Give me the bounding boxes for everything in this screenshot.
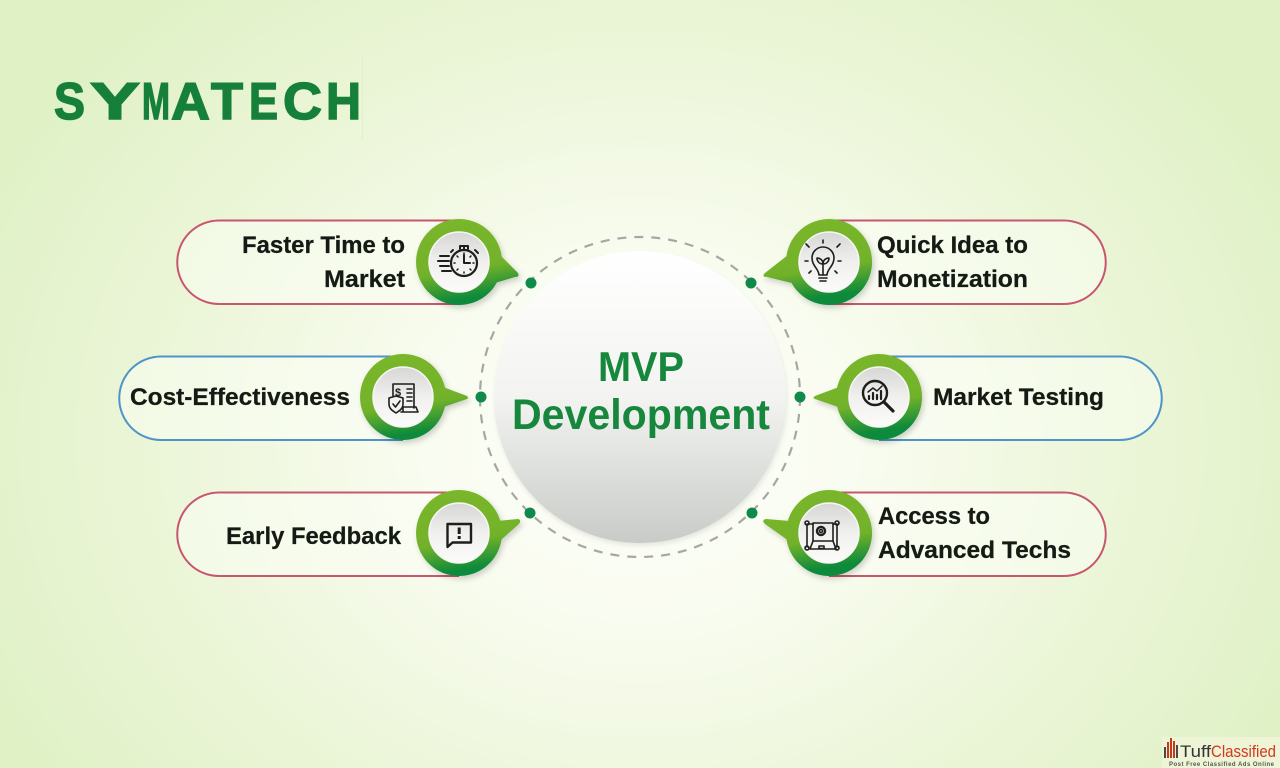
watermark: Tuff (1180, 742, 1211, 761)
badge: $ (395, 387, 401, 399)
icon: lightbulb (805, 240, 841, 281)
label: Access to (878, 503, 990, 530)
badge (763, 490, 872, 576)
hub title: Development (512, 391, 770, 439)
badge (416, 490, 520, 576)
hub title (512, 343, 770, 439)
label (878, 503, 1071, 564)
panel: faster time to market (177, 219, 519, 305)
badge (416, 219, 519, 305)
badge (360, 354, 468, 440)
panel: access to advanced techs (763, 490, 1106, 576)
label: Cost-Effectiveness (130, 384, 350, 411)
logo: T (211, 73, 243, 131)
icon: invoice and shield (389, 384, 418, 413)
panel: early feedback (177, 490, 520, 576)
watermark (1162, 737, 1280, 768)
label (242, 232, 405, 293)
badge (814, 354, 922, 440)
label: Quick Idea to (877, 232, 1028, 259)
panel: quick idea to monetization (763, 219, 1106, 305)
badge (763, 219, 872, 305)
label: Advanced Techs (878, 537, 1071, 564)
logo: M (142, 73, 170, 131)
watermark: Post Free Classified Ads Online (1169, 762, 1275, 768)
panel: cost-effectiveness (119, 354, 468, 440)
panel: market testing (814, 354, 1162, 440)
central hub (480, 237, 800, 557)
logo: A (171, 73, 210, 131)
logo: C (283, 73, 322, 131)
icon: feedback speech bubble (448, 524, 471, 547)
label: Market Testing (933, 384, 1104, 411)
label: Market (324, 266, 405, 293)
hub title: MVP (598, 343, 684, 390)
icon: watermark bars (1164, 738, 1178, 758)
logo: H (326, 73, 361, 131)
label: Faster Time to (242, 232, 405, 259)
icon: magnifier with chart (863, 381, 893, 411)
icon: laptop with gear (805, 521, 839, 550)
logo: Y (90, 73, 140, 131)
logo: S (54, 73, 85, 131)
dashed orbit (480, 237, 800, 557)
label (877, 232, 1028, 293)
label: Monetization (877, 266, 1028, 293)
logo (54, 73, 361, 131)
icon: stopwatch (438, 246, 478, 276)
logo: E (249, 73, 278, 131)
label: Early Feedback (226, 523, 402, 550)
connector dots (476, 278, 806, 518)
